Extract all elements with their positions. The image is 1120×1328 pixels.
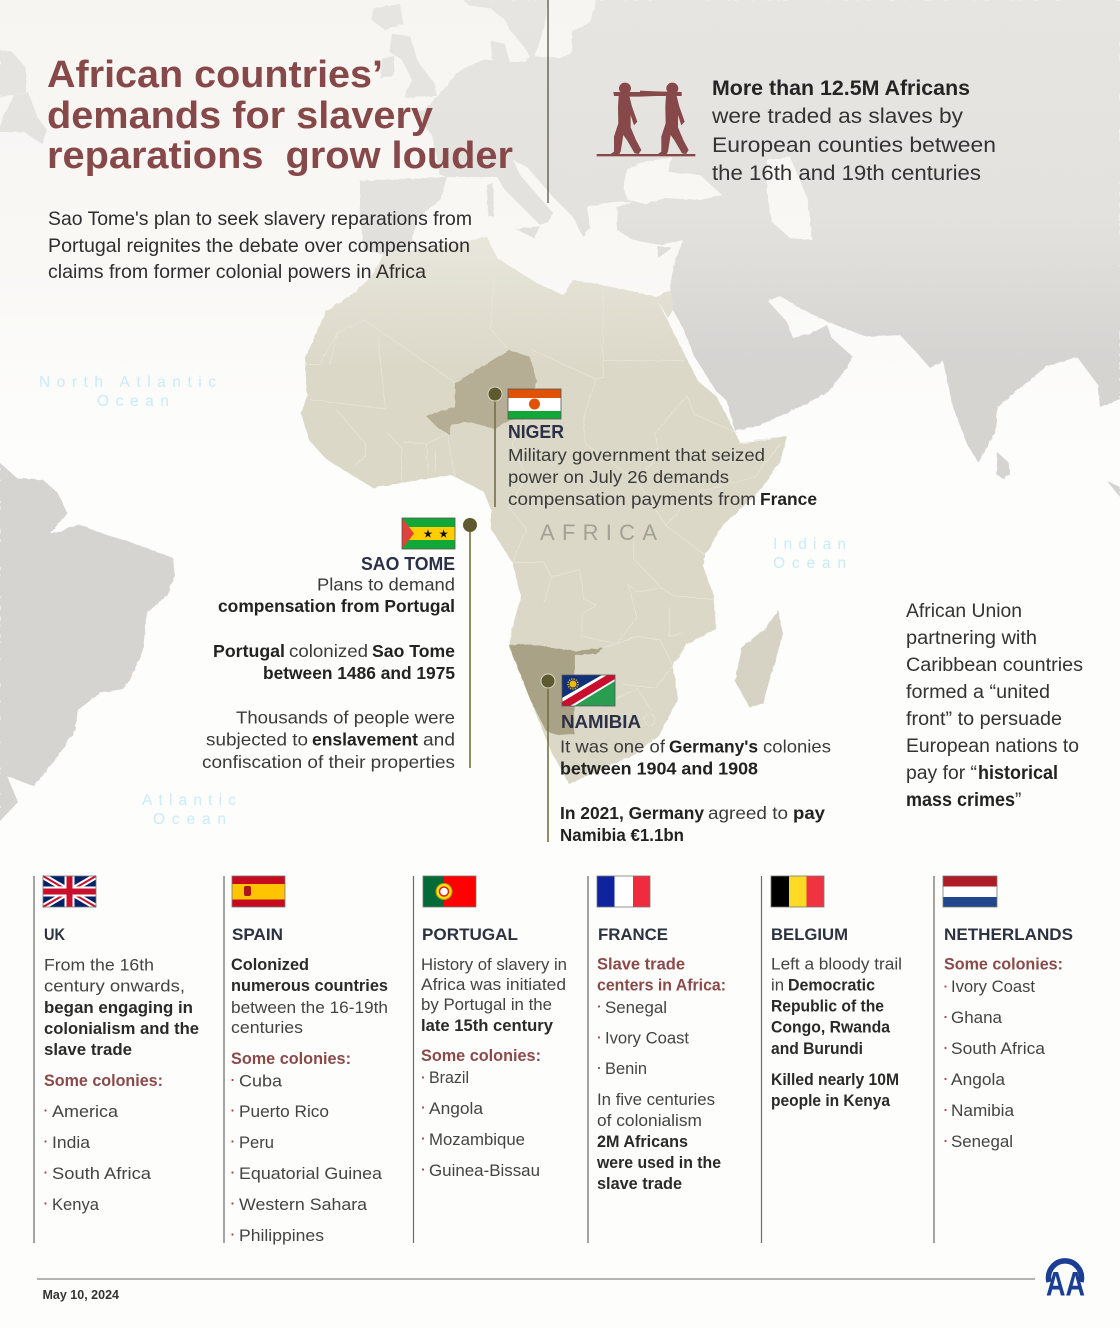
text: African Union: pay for “	[906, 763, 977, 784]
list: Netherlands colonies: Ghana	[951, 1009, 1003, 1027]
text: Sao Tome plans: compensation from Portugal	[218, 596, 455, 616]
text: UK history: began engaging in	[44, 999, 193, 1017]
callout: Sao Tome	[202, 518, 477, 772]
pin: Sao Tome	[463, 518, 477, 768]
text: Sao Tome enslavement: confiscation of their properties	[202, 752, 455, 772]
label: North Atlantic Ocean	[39, 374, 216, 410]
list: Portugal colonies: Brazil	[429, 1069, 469, 1087]
list: Netherlands colonies: South Africa	[951, 1040, 1046, 1058]
list: Netherlands colonies: Senegal	[951, 1133, 1013, 1151]
text: Namibia colonial history	[560, 736, 831, 778]
subtitle	[48, 208, 472, 283]
flag: Namibia	[562, 675, 615, 706]
map: Scandinavia	[463, 0, 548, 62]
map: South America	[0, 463, 175, 821]
text: Sao Tome plans	[218, 574, 455, 616]
heading: Netherlands: NETHERLANDS	[944, 926, 1073, 944]
title: demands for slavery	[47, 95, 433, 137]
text: African Union: ”	[1015, 790, 1021, 811]
heading: Portugal colonies: Some colonies:	[421, 1047, 541, 1065]
text: Portugal history: by Portugal in the	[421, 996, 552, 1014]
map: Africa borders	[303, 277, 780, 725]
map: Iceland and Ireland	[372, 4, 403, 78]
list: UK colonies: America	[52, 1103, 119, 1121]
text: Namibia colonial history: Germany's	[669, 736, 758, 756]
text: Belgium history: Democratic	[788, 976, 875, 994]
callout: Niger	[488, 387, 817, 509]
list: Netherlands colonies: Ivory Coast	[951, 978, 1035, 996]
list: Spain colonies	[231, 1072, 383, 1245]
text: African Union: Caribbean countries	[906, 655, 1083, 676]
map: Niger highlighted	[426, 350, 537, 435]
heading: France slave trade centers: centers in Africa:	[597, 976, 726, 994]
map: Mediterranean islands	[487, 183, 672, 258]
map: Madagascar	[735, 610, 783, 708]
text: Portugal history: Africa was initiated	[421, 976, 566, 994]
text: Namibia colonial history: It was one of	[560, 736, 665, 756]
text: France history	[596, 1091, 721, 1193]
text: Belgium history: Republic of the	[771, 998, 884, 1016]
list: Portugal colonies: Guinea-Bissau	[429, 1162, 540, 1180]
text: Namibia compensation	[560, 803, 825, 845]
label: Atlantic Ocean	[142, 792, 236, 828]
world map	[0, 0, 1120, 821]
list: France centers: Ivory Coast	[605, 1030, 689, 1048]
text: Niger demand: power on July 26 demands	[508, 467, 729, 487]
flag: UK	[43, 876, 96, 907]
callout: Namibia	[541, 674, 831, 845]
title: African countries’	[47, 54, 383, 96]
map: Iberia	[360, 177, 447, 254]
label: Indian Ocean	[773, 536, 846, 572]
text: UK history: century onwards,	[44, 978, 185, 996]
key fact: were traded as slaves by	[711, 105, 964, 128]
text: France history: 2M Africans	[597, 1133, 688, 1151]
text: African Union: partnering with	[906, 628, 1037, 649]
subtitle: Portugal reignites the debate over compensation	[48, 235, 470, 257]
heading: Spain colonies: Some colonies:	[231, 1050, 351, 1068]
panel: UK	[34, 876, 199, 1243]
key fact: European counties between	[712, 134, 996, 157]
text: Portugal history: late 15th century	[421, 1017, 554, 1035]
text: France history: In five centuries	[597, 1091, 715, 1109]
heading: Netherlands colonies: Some colonies:	[944, 956, 1063, 974]
list: Netherlands colonies	[944, 978, 1046, 1151]
panel: France	[588, 876, 726, 1243]
label: North Atlantic Ocean: Ocean	[97, 393, 169, 410]
label: Indian Ocean: Ocean	[773, 555, 846, 572]
text: UK history: colonialism and the	[44, 1020, 199, 1038]
heading: Spain: SPAIN	[232, 926, 283, 944]
pin: Niger	[488, 387, 502, 507]
text: African Union: African Union	[906, 601, 1022, 622]
logo: Anadolu Agency: AA	[1046, 1266, 1085, 1304]
heading: Belgium: BELGIUM	[771, 926, 848, 944]
text: Belgium history: and Burundi	[771, 1040, 863, 1058]
list: France centers: Senegal	[605, 999, 667, 1017]
panel: Portugal	[414, 876, 567, 1243]
text: Sao Tome history: Portugal	[213, 641, 285, 661]
map: Newfoundland	[0, 50, 47, 144]
map: Sri Lanka	[996, 452, 1010, 479]
heading: France slave trade centers	[597, 956, 726, 994]
text: UK history	[44, 956, 199, 1059]
text: African Union: European nations to	[906, 736, 1079, 757]
list: Netherlands colonies: Namibia	[951, 1102, 1015, 1120]
label: Africa: AFRICA	[540, 520, 657, 545]
text: African Union: front” to persuade	[906, 709, 1062, 730]
text: Sao Tome history: Sao Tome	[372, 641, 455, 661]
text: Sao Tome enslavement: subjected to	[206, 730, 308, 750]
map: Africa	[301, 237, 787, 784]
text: Namibia colonial history: between 1904 and 1908	[560, 758, 758, 778]
title	[47, 54, 513, 177]
text: Niger demand: Military government that seized	[508, 445, 765, 465]
label: North Atlantic Ocean: North Atlantic	[39, 374, 216, 391]
label: Atlantic Ocean: Ocean	[153, 811, 226, 828]
text: Portugal history	[421, 956, 567, 1035]
list: UK colonies	[44, 1103, 152, 1214]
list: UK colonies: South Africa	[52, 1165, 152, 1183]
text: Belgium history: Congo, Rwanda	[771, 1018, 891, 1036]
text: African Union: mass crimes	[906, 790, 1015, 811]
text: Sao Tome enslavement: and	[423, 730, 455, 750]
heading: Namibia: NAMIBIA	[561, 712, 641, 732]
list: Spain colonies: Puerto Rico	[239, 1103, 329, 1121]
text: UK history: slave trade	[44, 1041, 132, 1059]
heading: UK colonies: Some colonies:	[44, 1072, 163, 1090]
list: UK colonies: India	[52, 1134, 91, 1152]
list: Spain colonies: Equatorial Guinea	[239, 1165, 383, 1183]
header divider line	[547, 0, 549, 203]
list: Netherlands colonies: Angola	[951, 1071, 1006, 1089]
list: Portugal colonies: Angola	[429, 1100, 484, 1118]
flag: Portugal	[423, 876, 476, 907]
text: Spain history	[231, 956, 388, 1037]
list: Spain colonies: Western Sahara	[239, 1196, 368, 1214]
text: Namibia compensation: pay	[793, 803, 825, 823]
text: Namibia compensation: Namibia €1.1bn	[560, 825, 684, 845]
text: Belgium history: Left a bloody trail	[771, 956, 902, 974]
text: France history: were used in the	[596, 1154, 721, 1172]
heading: France: FRANCE	[598, 926, 668, 944]
panel: Netherlands	[934, 876, 1073, 1243]
flag: Sao Tome	[402, 518, 455, 549]
key fact: the 16th and 19th centuries	[712, 162, 981, 185]
text: Sao Tome enslavement: enslavement	[312, 730, 418, 750]
key fact: More than 12.5M Africans	[712, 77, 970, 100]
title: reparations grow louder	[47, 135, 513, 177]
pin: Namibia	[541, 674, 555, 842]
map: Eurasia and Arabia	[413, 0, 1120, 462]
text: Niger demand: compensation payments from	[508, 489, 756, 509]
date: May 10, 2024	[42, 1288, 119, 1302]
text: Spain history: Colonized	[231, 956, 309, 974]
heading: France slave trade centers: Slave trade	[597, 956, 685, 974]
heading: Portugal: PORTUGAL	[422, 926, 518, 944]
footer rule	[37, 1278, 1035, 1280]
text: Niger demand	[508, 445, 817, 509]
text: African Union: historical	[978, 763, 1058, 784]
text: Spain history: numerous countries	[231, 977, 388, 995]
flag: Netherlands	[943, 876, 997, 907]
icon: two chained enslaved people	[597, 83, 695, 156]
list: Spain colonies: Peru	[239, 1134, 274, 1152]
heading: Sao Tome: SAO TOME	[361, 554, 455, 574]
label: Indian Ocean: Indian	[773, 536, 846, 553]
list: Spain colonies: Philippines	[239, 1227, 324, 1245]
list: Spain colonies: Cuba	[239, 1072, 283, 1090]
text: Sao Tome enslavement: Thousands of people were	[236, 708, 455, 728]
text: Spain history: centuries	[231, 1019, 303, 1037]
text: Sao Tome plans: Plans to demand	[317, 574, 455, 594]
panel: Spain	[224, 876, 388, 1245]
text: Belgium history: Killed nearly 10M	[771, 1071, 899, 1089]
map: Namibia highlighted	[509, 644, 603, 735]
flag: Niger	[508, 389, 561, 419]
heading: Niger: NIGER	[508, 422, 564, 442]
text: Sao Tome history	[213, 641, 455, 683]
text: Belgium history: in	[771, 976, 784, 994]
flag: Belgium	[771, 876, 824, 907]
map: Great Britain	[390, 34, 437, 98]
flag: Spain	[232, 876, 285, 907]
list: France centers	[598, 999, 689, 1078]
heading: UK: UK	[44, 926, 65, 944]
text: France history: slave trade	[597, 1175, 682, 1193]
text: Portugal history: History of slavery in	[421, 956, 567, 974]
text: Spain history: between the 16-19th	[231, 999, 388, 1017]
text: UK history: From the 16th	[44, 956, 154, 974]
subtitle: claims from former colonial powers in Africa	[48, 261, 426, 283]
text: France history: of colonialism	[597, 1112, 702, 1130]
subtitle: Sao Tome's plan to seek slavery reparations from	[48, 208, 472, 230]
text: Namibia colonial history: colonies	[763, 736, 831, 756]
flag: France	[597, 876, 650, 907]
text: African Union: formed a “united	[906, 682, 1050, 703]
text: Sao Tome history: colonized	[289, 641, 368, 661]
key fact	[711, 77, 996, 185]
label: Atlantic Ocean: Atlantic	[142, 792, 236, 809]
text: Sao Tome enslavement	[202, 708, 455, 772]
list: UK colonies: Kenya	[52, 1196, 100, 1214]
text: African Union	[906, 601, 1083, 811]
list: Portugal colonies	[422, 1069, 540, 1180]
text: Namibia compensation: agreed to	[708, 803, 788, 823]
text: Namibia compensation: In 2021, Germany	[560, 803, 704, 823]
panel: Belgium	[762, 876, 902, 1243]
text: Belgium history: people in Kenya	[771, 1092, 891, 1110]
text: Sao Tome history: between 1486 and 1975	[263, 663, 455, 683]
list: Portugal colonies: Mozambique	[429, 1131, 525, 1149]
text: Niger demand: France	[760, 489, 817, 509]
text: Belgium history	[771, 956, 902, 1110]
list: France centers: Benin	[605, 1060, 647, 1078]
map: Sumatra edge	[1107, 481, 1120, 497]
